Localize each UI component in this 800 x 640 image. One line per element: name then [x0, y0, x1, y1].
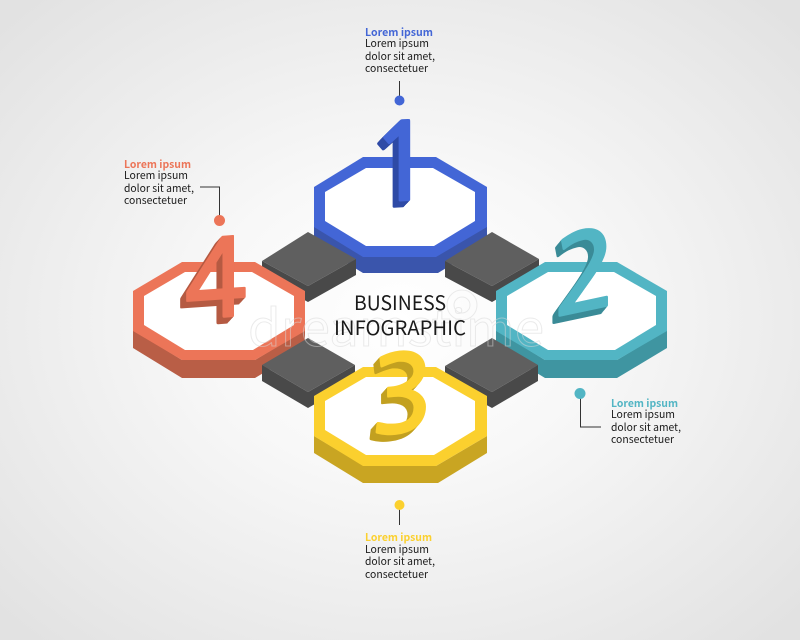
- title: BUSINESS: [354, 287, 446, 316]
- number 4: 4: [183, 226, 249, 337]
- text block: yellow: dolor sit amet,: [365, 554, 435, 569]
- octagon side: orange: [133, 330, 305, 378]
- text block: yellow: Lorem ipsum: [365, 542, 429, 557]
- text block: yellow: [365, 530, 435, 582]
- octagon side: teal: [496, 330, 667, 378]
- connector block: top right: [445, 232, 539, 302]
- octagon side: blue: [314, 187, 487, 273]
- text block: teal: dolor sit amet,: [611, 420, 681, 435]
- text block: teal: Lorem ipsum: [611, 407, 675, 422]
- text block: teal: Lorem ipsum: [611, 396, 678, 411]
- leader: teal: [574, 388, 601, 427]
- connector block: bottom right: [445, 338, 538, 408]
- text block: blue: Lorem ipsum: [365, 36, 429, 51]
- text block: blue: dolor sit amet,: [365, 49, 435, 64]
- text block: orange: [124, 157, 194, 208]
- text block: yellow: Lorem ipsum: [365, 530, 432, 545]
- text block: teal: consectetuer: [611, 432, 675, 447]
- text block: orange: dolor sit amet,: [124, 181, 194, 196]
- octagon: teal: [496, 262, 667, 360]
- watermark: dreamstime: [248, 289, 544, 361]
- text block: orange: Lorem ipsum: [124, 157, 191, 172]
- number 3: 3: [369, 340, 435, 453]
- octagon: orange: [133, 262, 305, 360]
- text block: teal: [611, 396, 681, 447]
- number 1: 1: [369, 109, 435, 220]
- leader: orange: [200, 187, 225, 226]
- octagon side: yellow: [314, 436, 487, 483]
- connector block: bottom left: [262, 338, 355, 408]
- title: [334, 287, 466, 341]
- text block: blue: [365, 25, 435, 76]
- octagon: blue: [314, 157, 487, 257]
- text block: orange: consectetuer: [124, 193, 188, 208]
- title: INFOGRAPHIC: [334, 312, 466, 341]
- text block: yellow: consectetuer: [365, 567, 429, 582]
- text block: blue: consectetuer: [365, 61, 429, 76]
- octagon: yellow: [314, 367, 487, 466]
- text block: orange: Lorem ipsum: [124, 168, 188, 183]
- text block: blue: Lorem ipsum: [365, 25, 433, 40]
- connector block: top left: [262, 232, 356, 302]
- leader: yellow: [394, 500, 404, 525]
- leader: blue: [394, 81, 404, 106]
- number 2: 2: [552, 214, 618, 335]
